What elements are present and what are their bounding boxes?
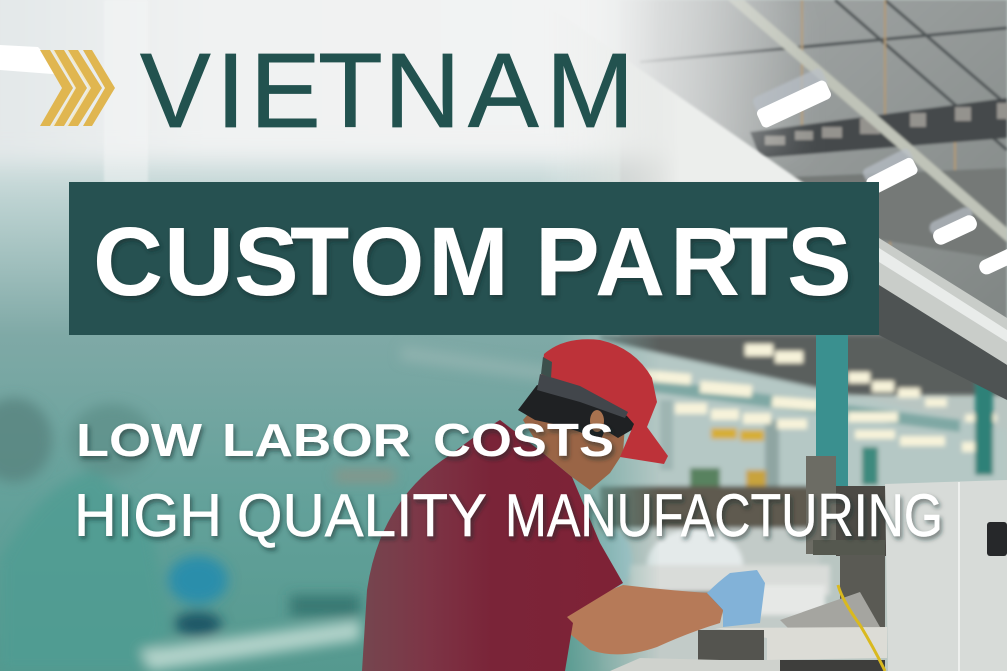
tagline: low labor costs: LABOR [222, 414, 411, 466]
far factory floor [592, 335, 1007, 671]
tagline: high quality manufacturing [74, 482, 943, 549]
left teal veil [0, 149, 654, 671]
tagline: high quality manufacturing: QUALITY [237, 482, 487, 549]
ceiling structure [620, 0, 1007, 340]
ear [590, 410, 604, 432]
pale pillar [104, 0, 148, 182]
mid-ground tables and workers [600, 486, 830, 531]
bright window streak [0, 45, 65, 75]
logo chevrons [40, 50, 115, 126]
cap gap [541, 357, 552, 378]
duct beside banner [879, 238, 1007, 365]
tagline: low labor costs: LOW [76, 414, 203, 466]
arm [560, 585, 723, 654]
ceiling lights [755, 79, 1007, 277]
torso and sleeve [362, 420, 623, 671]
blurred workers on left [0, 346, 600, 671]
tagline: high quality manufacturing: HIGH [74, 482, 222, 549]
face and neck [523, 400, 625, 490]
ceiling light halos [751, 67, 975, 237]
banner: CUSTOM PARTS [69, 182, 879, 335]
heading: VIETNAM: VIETNAM [140, 32, 634, 150]
top white veil [0, 0, 830, 158]
hair [518, 385, 635, 442]
cap strap [537, 374, 628, 418]
glove [707, 570, 765, 627]
duct above banner [540, 0, 805, 184]
banner: CUSTOM PARTS: CUSTOM PARTS [93, 207, 852, 316]
tagline: low labor costs [76, 414, 614, 466]
cap [541, 339, 668, 464]
tagline: low labor costs: COSTS [433, 414, 614, 466]
worker [362, 339, 765, 671]
machine on the right [610, 335, 1007, 671]
